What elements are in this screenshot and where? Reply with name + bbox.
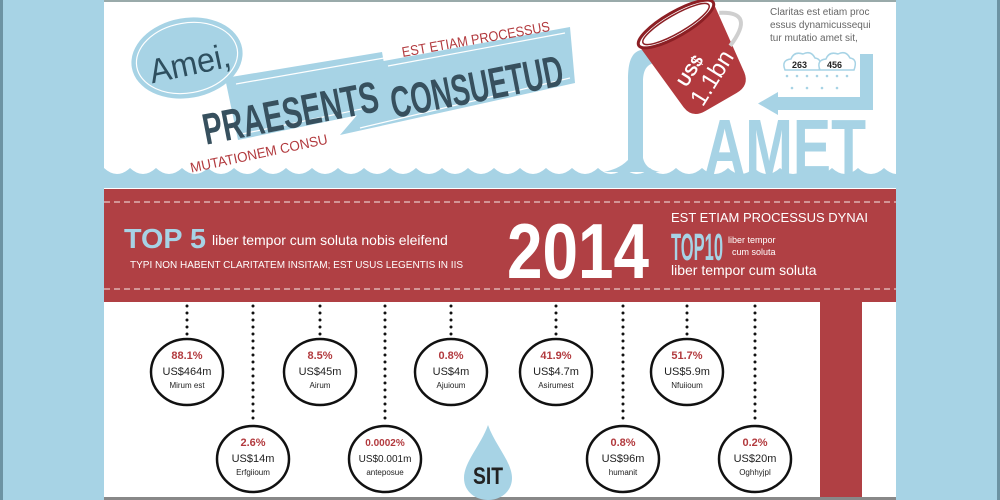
text block: claritas: tur mutatio amet sit,: [770, 33, 858, 44]
circle: 41.9%: Asirumest: [538, 381, 575, 390]
icon: clouds: 263: [792, 60, 807, 70]
circle: 8.5%: [284, 339, 356, 405]
circle: 0.8% humanit: humanit: [609, 468, 638, 477]
circle: 0.2%: Oghhyjpl: [739, 468, 771, 477]
title: AMET: AMET: [704, 103, 866, 192]
circle: 2.6%: Erfgiioum: [236, 468, 270, 477]
text: MUTATIONEM CONSU: MUTATIONEM CONSU: [189, 131, 329, 176]
red band: liber tempor: [728, 235, 776, 245]
circle: 2.6%: 2.6%: [240, 437, 266, 449]
text: EST ETIAM PROCESSUS: EST ETIAM PROCESSUS: [401, 18, 551, 60]
poster background: [104, 0, 896, 500]
text: bucket value: 1.1bn: [685, 45, 740, 111]
text block: claritas: [770, 7, 871, 44]
water stream: [604, 49, 662, 172]
circle: 8.5%: 8.5%: [307, 350, 333, 362]
circle: 88.1%: [151, 339, 223, 405]
text: subline: TYPI NON HABENT CLARITATEM INSITAM; EST USUS LEGENTIS IN IIS: [130, 260, 463, 271]
icon: clouds: 456: [827, 60, 842, 70]
dotted connectors: [187, 306, 755, 422]
wave band: [104, 168, 896, 188]
red band: [104, 189, 896, 302]
circle: 0.8%: Ajuioum: [437, 381, 466, 390]
red column: [820, 300, 862, 497]
circle: 2.6%: US$14m: [232, 453, 274, 465]
text block: claritas: essus dynamicussequi: [770, 20, 871, 31]
circle: 41.9%: [520, 339, 592, 405]
circle: 51.7%: Nfuiioum: [671, 381, 703, 390]
circle: 0.2%: US$20m: [734, 453, 776, 465]
red band: liber tempor cum soluta nobis eleifend: [212, 232, 448, 248]
text: TOP 5: TOP 5: [124, 223, 206, 254]
circle: 0.0002%: anteposue: [366, 468, 404, 477]
red band: cum soluta: [732, 247, 776, 257]
circle: 0.2%: [719, 426, 791, 492]
circle: 2.6%: [217, 426, 289, 492]
circle: 8.5%: US$45m: [299, 366, 341, 378]
circle: 41.9%: US$4.7m: [533, 366, 579, 378]
circle: 0.8%: 0.8%: [438, 350, 464, 362]
icon: drop SIT: [464, 425, 512, 500]
circle: 0.2%: 0.2%: [742, 437, 768, 449]
text: CONSUETUD: CONSUETUD: [386, 47, 567, 128]
icon: bucket: [633, 0, 771, 123]
text block: claritas: Claritas est etiam proc: [770, 7, 869, 18]
circle: 0.8%: [415, 339, 487, 405]
circle: 8.5%: Airum: [310, 381, 331, 390]
speech bubble: [125, 9, 249, 107]
red band: liber tempor cum soluta: [671, 262, 817, 278]
text: bucket value: [670, 36, 740, 111]
circles: [151, 339, 791, 500]
title banner: [125, 9, 575, 176]
circle: 0.8% humanit: [587, 426, 659, 492]
circle: 88.1%: Mirum est: [169, 381, 205, 390]
ribbon 2: [340, 27, 575, 135]
circle: 0.0002%: US$0.001m: [359, 454, 411, 465]
icon: drop SIT: SIT: [473, 463, 503, 490]
circle: 0.0002%: 0.0002%: [365, 438, 405, 449]
circle: 51.7%: US$5.9m: [664, 366, 710, 378]
circle: 51.7%: [651, 339, 723, 405]
text: 2014: 2014: [507, 207, 649, 295]
arrow: [758, 54, 873, 115]
circle: 88.1%: 88.1%: [171, 350, 203, 362]
circle: 41.9%: 41.9%: [540, 350, 572, 362]
text: right block: EST ETIAM PROCESSUS DYNAI: [671, 210, 868, 225]
red band: TOP10: [671, 227, 723, 269]
text: Amei,: Amei,: [146, 37, 234, 91]
ribbon 1: [225, 52, 392, 140]
circle: 0.8% humanit: US$96m: [602, 453, 644, 465]
circle: 0.8%: US$4m: [433, 366, 469, 378]
circle: 0.0002%: [349, 426, 421, 492]
icon: clouds: [784, 53, 855, 89]
text: PRAESENTS: PRAESENTS: [199, 73, 383, 155]
circle: 88.1%: US$464m: [163, 366, 211, 378]
text: bucket value: US$: [674, 52, 708, 90]
circle: 0.8% humanit: 0.8%: [610, 437, 636, 449]
circle: 51.7%: 51.7%: [671, 350, 703, 362]
